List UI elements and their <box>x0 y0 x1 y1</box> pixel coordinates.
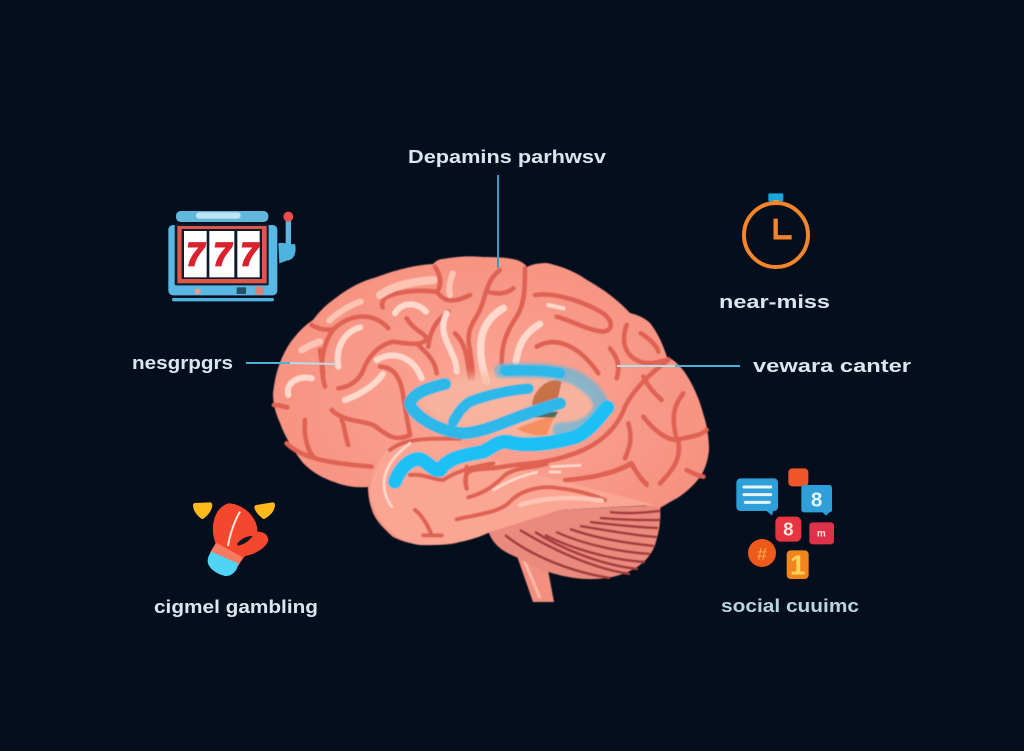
icon: social notifications <box>736 468 834 580</box>
callout line: dopamine pathway <box>497 175 499 268</box>
pink tile <box>809 522 834 544</box>
label: near-miss: near-miss <box>719 292 830 312</box>
pink tile glyph: m <box>817 529 826 540</box>
inner insula glow <box>420 371 596 440</box>
sulci: upper cerebrum <box>274 267 707 488</box>
heading label: dopamine pathway: Depamins parhwsv <box>408 147 606 167</box>
orange tile <box>788 468 808 486</box>
cerebrum outline <box>273 256 709 545</box>
brain illustration <box>273 256 709 602</box>
callout line: reward center <box>617 365 740 367</box>
blue tile <box>801 485 832 516</box>
callout line: receptors <box>246 363 336 364</box>
label: digital gambling: cigmel gambling <box>154 597 318 617</box>
label: reward center: vewara canter <box>753 356 911 376</box>
label: receptors: nesgrpgrs <box>132 353 233 373</box>
brain stem <box>490 530 554 602</box>
dopamine pathway <box>395 370 607 482</box>
cerebellum <box>488 505 660 579</box>
bubble lines <box>744 487 771 502</box>
icon: stopwatch <box>744 193 808 267</box>
icon: slot machine: 7 <box>213 236 233 272</box>
blue tile glyph: 8 <box>811 489 822 512</box>
temporal lobe highlights <box>384 443 602 507</box>
orange circle glyph: # <box>757 544 767 564</box>
chat bubble <box>736 478 778 516</box>
icon: slot machine: 7 <box>240 236 260 272</box>
dopamine centre patches <box>517 380 562 435</box>
temporal lobe shading <box>370 440 655 545</box>
glossy highlights <box>288 273 563 400</box>
sulci: temporal lobe <box>390 439 647 535</box>
icon: slot machine <box>168 211 296 300</box>
yellow tile <box>787 550 809 579</box>
red tile glyph: 8 <box>783 519 794 540</box>
icon: slot machine: 7 <box>186 236 206 272</box>
label: social cuuimc: social cuuimc <box>721 596 859 616</box>
yellow tile glyph: 1 <box>790 549 805 580</box>
icon: boxing glove <box>195 503 273 576</box>
orange circle <box>748 539 776 567</box>
red tile <box>775 517 801 542</box>
